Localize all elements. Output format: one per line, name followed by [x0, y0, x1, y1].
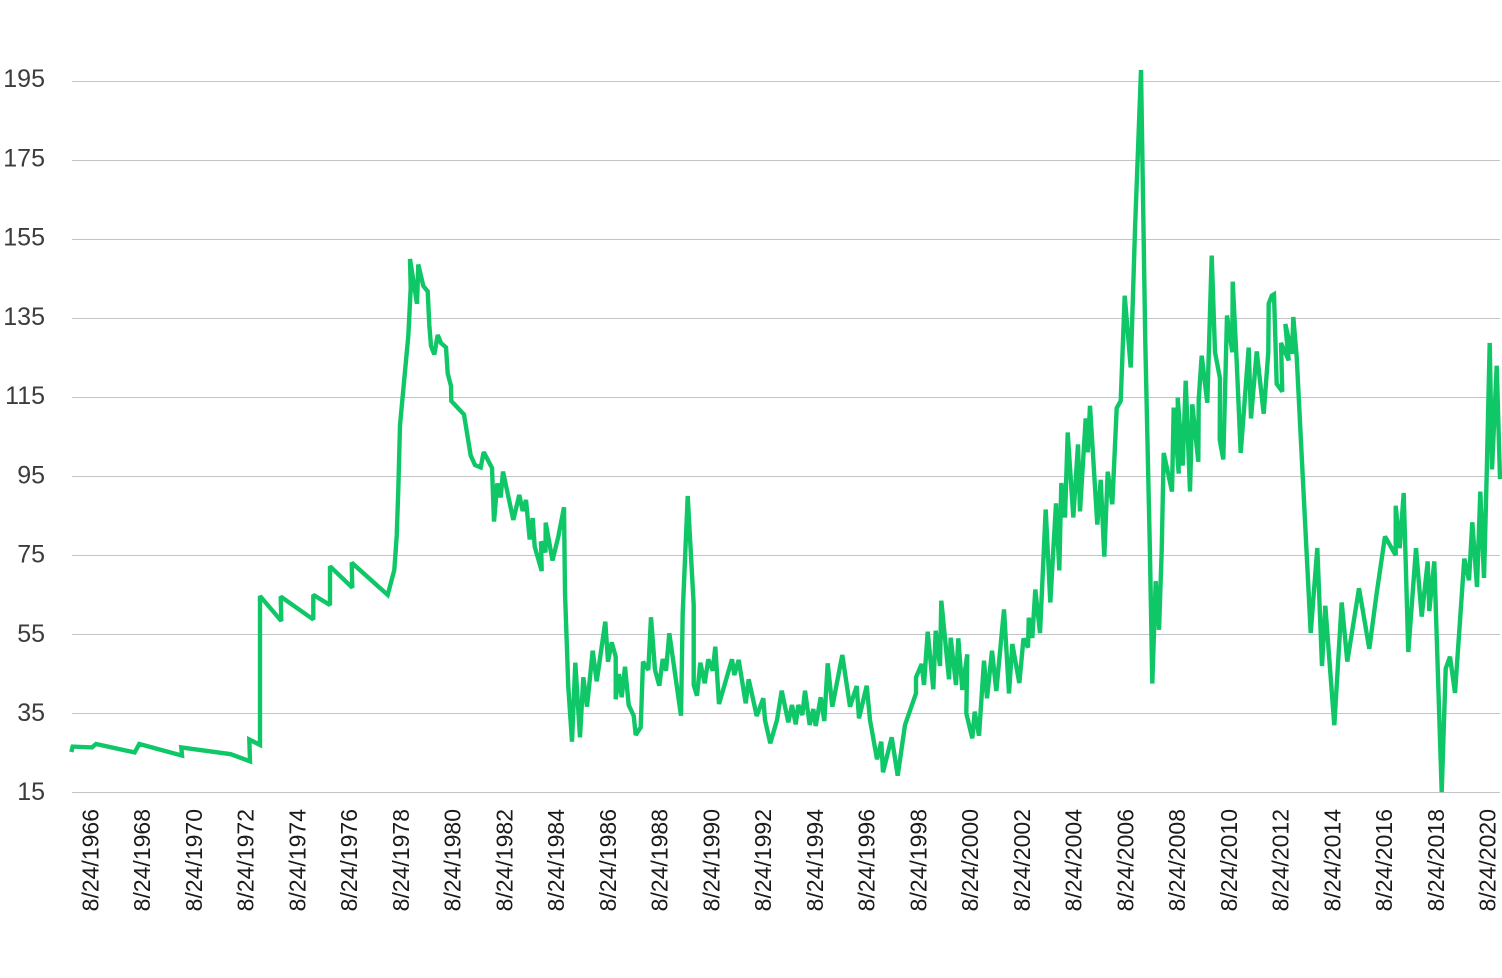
y-axis labels: 175 [3, 144, 45, 172]
x-axis date labels: 8/24/1998 [906, 809, 932, 911]
y-axis labels: 15 [17, 778, 45, 806]
x-axis date labels: 8/24/1994 [802, 809, 828, 911]
x-axis date labels: 8/24/2016 [1371, 809, 1397, 911]
y-axis labels: 155 [3, 224, 45, 252]
x-axis date labels: 8/24/2004 [1061, 809, 1087, 911]
x-axis date labels: 8/24/1982 [492, 809, 518, 911]
x-axis date labels: 8/24/1976 [336, 809, 362, 911]
x-axis date labels: 8/24/2010 [1216, 809, 1242, 911]
x-axis date labels: 8/24/1966 [78, 809, 104, 911]
green data line [71, 70, 1500, 792]
x-axis date labels: 8/24/1990 [698, 809, 724, 911]
x-axis date labels: 8/24/2020 [1475, 809, 1501, 911]
y-axis labels: 135 [3, 303, 45, 331]
x-axis date labels: 8/24/2006 [1112, 809, 1138, 911]
x-axis date labels: 8/24/2014 [1320, 809, 1346, 911]
x-axis date labels [78, 809, 1501, 911]
x-axis date labels: 8/24/1978 [388, 809, 414, 911]
y-axis labels: 55 [17, 620, 45, 648]
x-axis date labels: 8/24/1988 [647, 809, 673, 911]
x-axis date labels: 8/24/1986 [595, 809, 621, 911]
y-axis labels [3, 65, 45, 806]
y-axis labels: 75 [17, 540, 45, 568]
x-axis date labels: 8/24/1968 [129, 809, 155, 911]
y-axis labels: 95 [17, 461, 45, 489]
x-axis date labels: 8/24/1972 [233, 809, 259, 911]
x-axis date labels: 8/24/2002 [1009, 809, 1035, 911]
x-axis date labels: 8/24/2012 [1268, 809, 1294, 911]
x-axis date labels: 8/24/2018 [1423, 809, 1449, 911]
x-axis date labels: 8/24/1984 [543, 809, 569, 911]
x-axis date labels: 8/24/1974 [284, 809, 310, 911]
y-axis labels: 35 [17, 699, 45, 727]
x-axis date labels: 8/24/1970 [181, 809, 207, 911]
x-axis date labels: 8/24/1980 [440, 809, 466, 911]
x-axis date labels: 8/24/2008 [1164, 809, 1190, 911]
x-axis date labels: 8/24/1996 [854, 809, 880, 911]
x-axis date labels: 8/24/2000 [957, 809, 983, 911]
y-axis labels: 115 [5, 382, 45, 410]
y-axis labels: 195 [3, 65, 45, 93]
x-axis date labels: 8/24/1992 [750, 809, 776, 911]
